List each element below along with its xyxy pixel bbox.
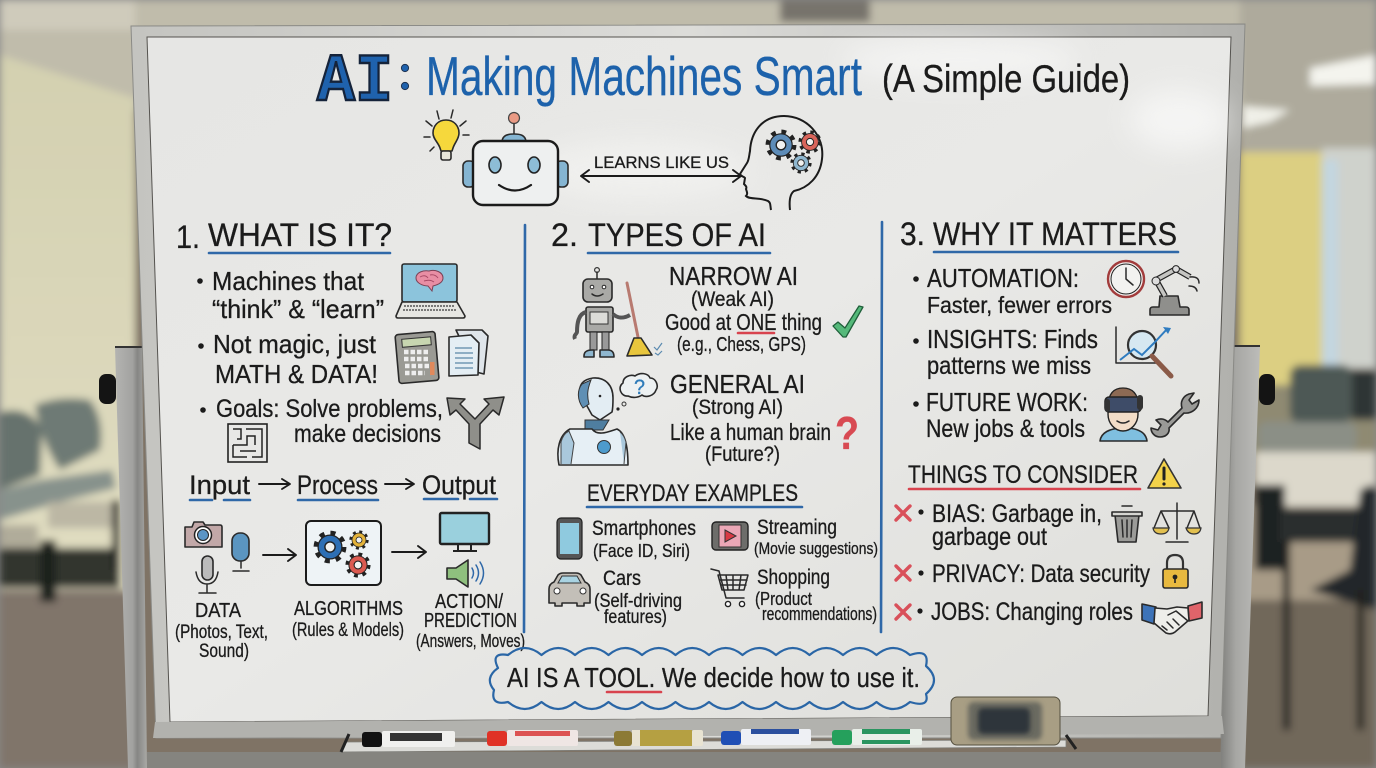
label: data: (Photos, Text, xyxy=(175,622,268,643)
bullet: future work xyxy=(913,387,1088,443)
label: action xyxy=(416,591,525,651)
icon: grey microphone xyxy=(196,556,218,593)
bullet: machines: Machines that xyxy=(212,266,365,296)
divider xyxy=(524,225,525,632)
icon: documents xyxy=(449,330,488,376)
chairs left xyxy=(0,410,42,490)
title: main: Making Machines Smart xyxy=(426,45,862,107)
icon: speaker xyxy=(447,560,484,587)
heading: 3. xyxy=(900,216,925,252)
label: algorithms xyxy=(292,598,404,641)
icon: thought bubble: ? xyxy=(634,376,645,399)
bullet: insights: INSIGHTS: Finds xyxy=(927,324,1098,354)
icon: narrow robot with broom xyxy=(574,268,662,357)
red marker xyxy=(487,730,578,746)
icon: head with gears xyxy=(740,116,822,210)
heading: 2. xyxy=(551,217,578,253)
panel: why it matters xyxy=(896,216,1202,634)
icon: laptop with brain xyxy=(396,264,465,318)
narrow ai text xyxy=(665,261,822,356)
streaming text: Streaming xyxy=(757,516,837,539)
narrow ai text: (e.g., Chess, GPS) xyxy=(677,334,806,356)
green marker xyxy=(832,729,922,745)
icon: general ai robot xyxy=(558,378,628,465)
arrow xyxy=(392,546,426,558)
bullet: automation: Faster, fewer errors xyxy=(927,292,1112,318)
board glare xyxy=(530,42,1230,200)
whiteboard frame xyxy=(131,24,1245,738)
bullet: not magic: Not magic, just xyxy=(213,329,377,359)
cars text: features) xyxy=(604,607,667,628)
bullet: insights xyxy=(913,324,1098,380)
bullet: jobs: JOBS: Changing roles xyxy=(931,598,1133,626)
icon: trash can xyxy=(1112,506,1142,542)
smartphones text: Smartphones xyxy=(592,517,696,540)
icon: algorithm box xyxy=(306,521,381,585)
title colon xyxy=(401,64,409,90)
icon: shopping cart xyxy=(711,569,748,607)
black marker xyxy=(362,731,455,747)
bullet: automation xyxy=(913,263,1112,318)
label: data: Sound) xyxy=(199,641,249,662)
icon: smartphone xyxy=(557,518,582,559)
label: data xyxy=(175,600,268,662)
title xyxy=(317,44,1130,121)
label: action: ACTION/ xyxy=(435,591,503,613)
bullet: machines xyxy=(197,266,384,324)
gold marker xyxy=(614,730,703,746)
heading: WHAT IS IT? xyxy=(208,217,392,253)
bullet: machines: “think” & “learn” xyxy=(212,294,384,324)
streaming text: (Movie suggestions) xyxy=(754,539,878,558)
general ai text: (Strong AI) xyxy=(692,396,783,419)
icon: balance scales xyxy=(1153,503,1201,542)
subheading: things to consider: THINGS TO CONSIDER xyxy=(908,461,1138,489)
bullet: bias: garbage out xyxy=(932,523,1047,551)
shopping text xyxy=(755,566,877,624)
bullet: not magic xyxy=(198,329,378,389)
icon: vr person xyxy=(1100,388,1147,441)
title: subtitle: (A Simple Guide) xyxy=(882,58,1130,101)
icon: wrench xyxy=(1151,393,1199,437)
icon: robot xyxy=(463,112,568,205)
heading: WHY IT MATTERS xyxy=(933,216,1177,252)
icon: red question mark: ? xyxy=(835,407,859,459)
general ai text xyxy=(670,369,831,466)
bullet: future work: FUTURE WORK: xyxy=(926,387,1088,417)
general ai text: (Future?) xyxy=(705,443,780,466)
panel: what is it xyxy=(175,217,525,662)
label: action: (Answers, Moves) xyxy=(416,631,525,651)
icon: blue microphone xyxy=(232,533,249,571)
general ai text: Like a human brain xyxy=(670,419,831,445)
icon: monitor xyxy=(440,513,489,551)
bullet: not magic: MATH & DATA! xyxy=(215,359,378,389)
bullet: goals: Goals: Solve problems, xyxy=(216,395,443,423)
smartphones text: (Face ID, Siri) xyxy=(593,541,690,561)
flow heading xyxy=(189,470,497,500)
divider xyxy=(881,222,882,632)
icon: film streaming xyxy=(712,522,748,550)
icon: maze xyxy=(228,424,267,462)
smartphones text xyxy=(592,517,696,561)
arrow: double headed xyxy=(581,170,741,182)
bullet: insights: patterns we miss xyxy=(927,352,1091,380)
bullet: automation: AUTOMATION: xyxy=(927,263,1079,293)
chairs right xyxy=(1290,365,1352,423)
label: action: PREDICTION xyxy=(424,610,517,632)
bullet: privacy: PRIVACY: Data security xyxy=(932,560,1150,588)
icon: green check xyxy=(833,306,863,337)
icon: handshake xyxy=(1142,602,1202,634)
bullet: goals: make decisions xyxy=(294,420,441,448)
title: AI: AI xyxy=(317,44,393,121)
icon: fork arrow xyxy=(447,397,504,449)
heading: 1. xyxy=(176,219,200,255)
label: algorithms: (Rules & Models) xyxy=(292,620,404,641)
bullet: goals xyxy=(200,395,443,448)
icon: clock xyxy=(1108,261,1144,297)
label: learns like us: LEARNS LIKE US xyxy=(594,153,729,172)
callout: AI is a tool cloud xyxy=(490,648,934,709)
flow heading: Process xyxy=(297,470,378,500)
arrow xyxy=(263,549,296,561)
bullet: bias: BIAS: Garbage in, xyxy=(932,500,1102,528)
narrow ai text: (Weak AI) xyxy=(691,288,774,311)
eraser xyxy=(951,697,1060,745)
shopping text: recommendations) xyxy=(762,604,877,624)
cars text: Cars xyxy=(603,567,641,590)
panel: types of ai xyxy=(549,217,878,628)
narrow ai text: NARROW AI xyxy=(669,261,798,291)
flow heading: Output xyxy=(422,470,496,500)
label: data: DATA xyxy=(195,600,242,622)
heading: TYPES OF AI xyxy=(588,217,766,253)
streaming text xyxy=(754,516,878,558)
shopping text: (Product xyxy=(755,589,812,609)
icon: calculator xyxy=(395,331,439,384)
subheading: everyday examples: EVERYDAY EXAMPLES xyxy=(587,480,798,507)
bullet: bias xyxy=(896,500,1102,551)
icon: thought bubble xyxy=(616,374,657,411)
general ai text: GENERAL AI xyxy=(670,369,805,399)
cars text: (Self-driving xyxy=(594,591,682,612)
icon: light bulb xyxy=(424,110,469,160)
flow heading: Input xyxy=(189,470,250,500)
cars text xyxy=(594,567,682,628)
icon: camera xyxy=(185,522,222,547)
callout text: AI IS A TOOL. We decide how to use it. xyxy=(507,662,920,693)
bullet: future work: New jobs & tools xyxy=(926,415,1085,443)
icon: car xyxy=(549,573,590,606)
label: algorithms: ALGORITHMS xyxy=(294,598,403,620)
icon: chart with magnifier xyxy=(1116,327,1171,376)
narrow ai text: Good at ONE thing xyxy=(665,309,822,335)
blue marker xyxy=(721,729,811,745)
marker tray xyxy=(147,716,1224,768)
callout underline xyxy=(607,691,661,693)
icon: warning triangle xyxy=(1148,459,1181,488)
icon: robot arm xyxy=(1150,266,1199,315)
icon: padlock xyxy=(1163,555,1188,588)
whiteboard stand posts xyxy=(99,345,1275,768)
whiteboard surface xyxy=(147,37,1231,722)
shopping text: Shopping xyxy=(757,566,830,589)
